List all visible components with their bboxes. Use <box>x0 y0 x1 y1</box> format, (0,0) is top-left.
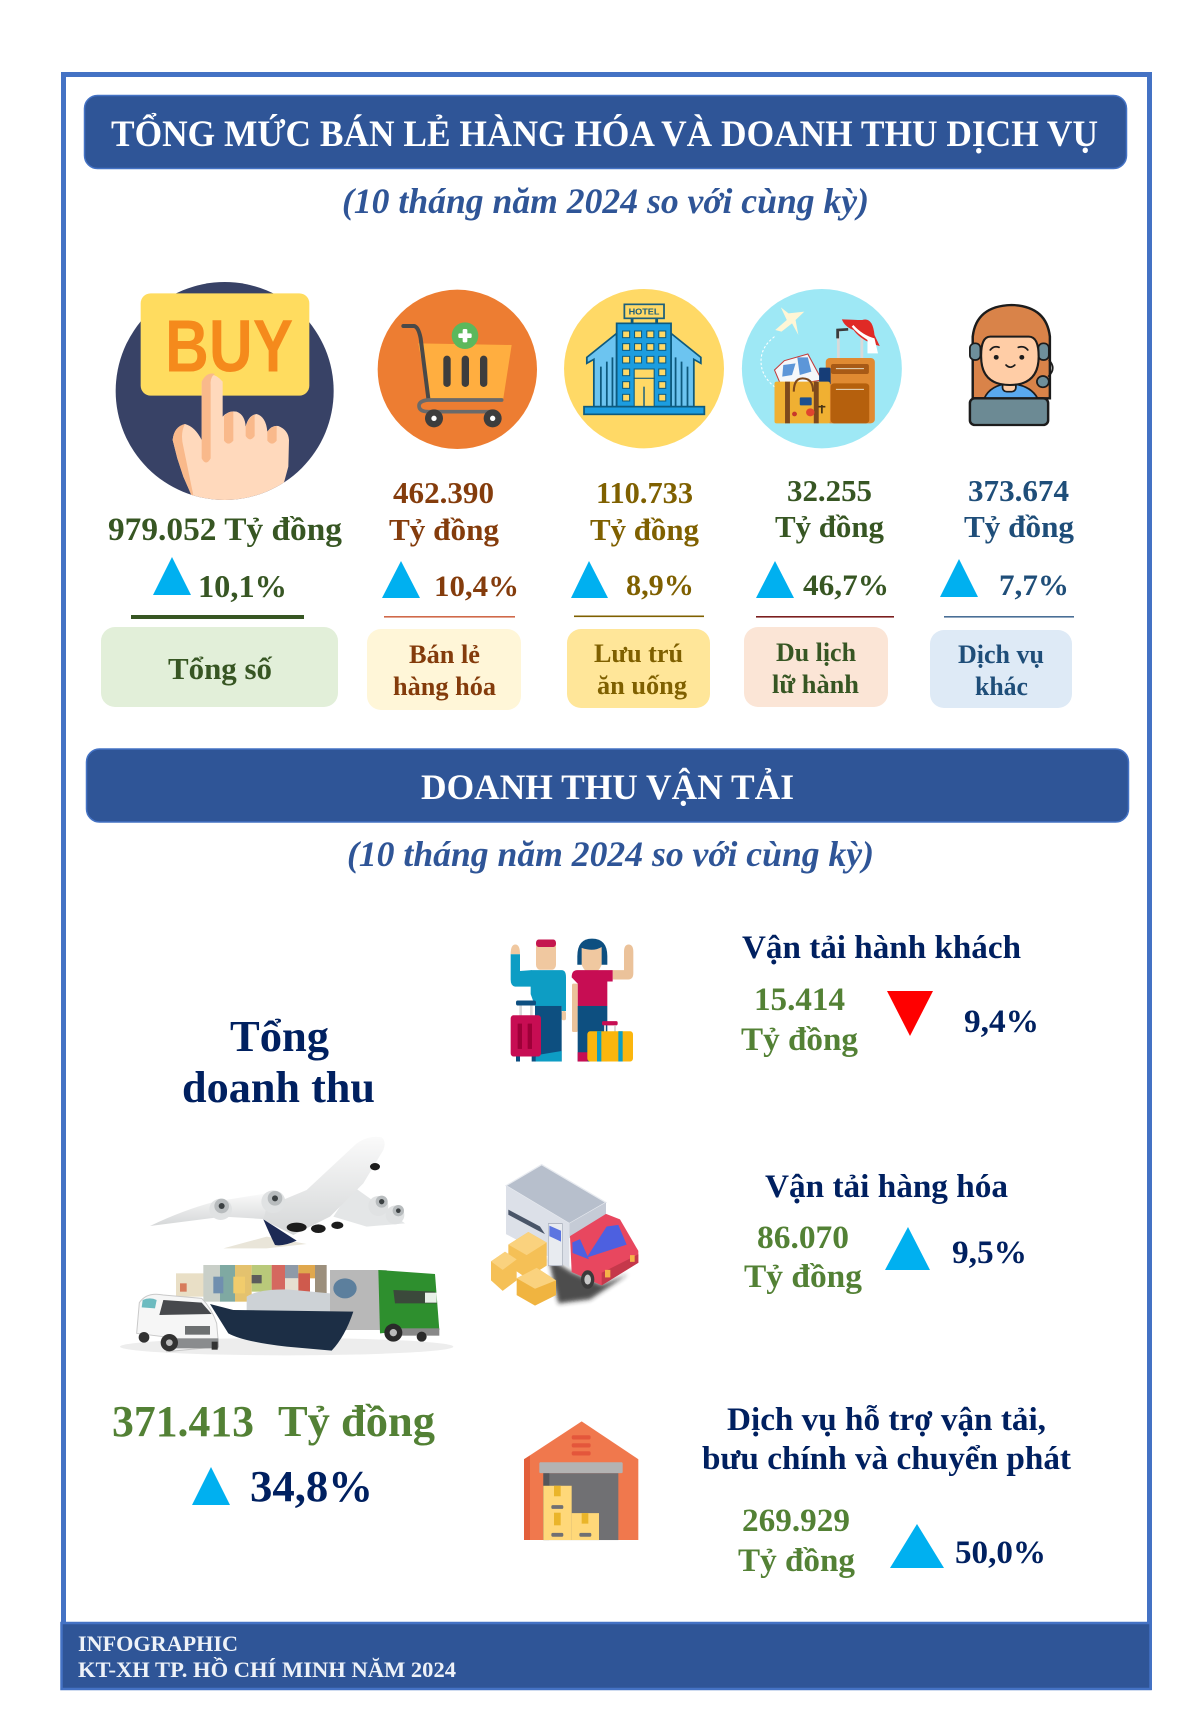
value: accommodation: Tỷ đồng <box>590 512 699 547</box>
value: retail goods: Tỷ đồng <box>389 512 499 547</box>
heading: transport <box>86 749 1128 822</box>
footer band: KT-XH TP. HỒ CHÍ MINH NĂM 2024 <box>78 1657 456 1682</box>
icon: hotel <box>564 289 724 448</box>
value: travel: Tỷ đồng <box>775 509 884 544</box>
text: logistics and postal services: bưu chính và chuyển phát <box>702 1441 1071 1477</box>
label: accommodation: Lưu trú <box>594 639 683 668</box>
panel: transport revenue <box>86 749 1128 1579</box>
subtitle: retail period: (10 tháng năm 2024 so với cùng kỳ) <box>342 181 869 221</box>
text: freight transport: Vận tải hàng hóa <box>765 1169 1008 1205</box>
footer band <box>62 1623 1150 1689</box>
icon: warehouse <box>524 1421 638 1540</box>
arrow: total transport up <box>192 1467 230 1505</box>
growth: retail: 10,4% <box>434 570 519 603</box>
heading: retail and services: TỔNG MỨC BÁN LẺ HÀNG HÓA VÀ DOANH THU DỊCH VỤ <box>111 112 1098 155</box>
arrow: accommodation up <box>571 561 608 598</box>
heading: transport: DOANH THU VẬN TẢI <box>421 767 794 807</box>
column: other services <box>930 473 1074 708</box>
arrow: other services up <box>940 559 978 597</box>
icon: buy button <box>116 282 334 503</box>
growth: total: 10,1% <box>198 568 287 604</box>
growth: other services: 7,7% <box>999 569 1069 602</box>
growth: total transport: 34,8% <box>250 1462 373 1511</box>
column: travel <box>744 473 894 707</box>
panel: retail and services revenue <box>84 96 1126 710</box>
label: retail goods: Bán lẻ <box>409 640 480 669</box>
text: passenger transport: 15.414 <box>754 982 845 1018</box>
heading: total revenue: Tổng <box>230 1012 329 1061</box>
text: freight transport <box>744 1169 1008 1295</box>
text: passenger transport <box>741 930 1021 1058</box>
label: other services: Dịch vụ <box>958 640 1044 669</box>
icon: passengers <box>511 939 633 1062</box>
text: logistics and postal services: 269.929 <box>742 1503 850 1539</box>
growth: passenger: 9,4% <box>964 1004 1039 1040</box>
icon: delivery truck <box>491 1165 638 1306</box>
text: passenger transport: Tỷ đồng <box>741 1022 859 1058</box>
heading: retail and services <box>84 96 1126 168</box>
text: logistics and postal services: Tỷ đồng <box>738 1543 856 1579</box>
arrow: retail up <box>382 561 420 598</box>
column: accommodation and food <box>567 475 710 708</box>
label: total <box>101 627 338 707</box>
column: total <box>101 512 343 707</box>
footer band: INFOGRAPHIC <box>78 1631 238 1656</box>
label: other services: khác <box>975 672 1028 701</box>
value: retail goods: 462.390 <box>393 475 494 510</box>
value: retail goods <box>389 475 499 547</box>
value: accommodation <box>590 475 699 547</box>
value: accommodation: 110.733 <box>596 475 693 510</box>
illustration: plane, ship, truck and van <box>120 1137 453 1355</box>
label: retail goods: hàng hóa <box>393 672 496 701</box>
icon: shopping cart <box>378 290 537 449</box>
label: other services <box>930 630 1072 708</box>
value: total transport revenue <box>112 1397 435 1446</box>
label: accommodation: ăn uống <box>597 671 687 700</box>
arrow: freight up <box>885 1227 930 1270</box>
value: other services <box>964 473 1074 544</box>
value: travel: 32.255 <box>787 473 872 508</box>
growth: freight: 9,5% <box>952 1235 1027 1271</box>
arrow: total up <box>153 557 191 595</box>
label: travel: lữ hành <box>772 670 860 699</box>
value: other services: Tỷ đồng <box>964 509 1074 544</box>
value: total transport revenue: Tỷ đồng <box>278 1397 435 1446</box>
value: other services: 373.674 <box>968 473 1069 508</box>
icon: call centre agent <box>970 305 1053 425</box>
label: travel <box>744 627 888 707</box>
text: logistics and postal services: Dịch vụ hỗ trợ vận tải, <box>727 1402 1046 1438</box>
arrow: passenger down <box>887 991 933 1036</box>
growth: accommodation: 8,9% <box>626 569 694 602</box>
value: travel <box>775 473 884 544</box>
heading: total revenue <box>182 1012 375 1112</box>
growth: travel: 46,7% <box>803 569 889 602</box>
label: travel: Du lịch <box>776 638 857 667</box>
text: logistics and postal services <box>702 1402 1071 1579</box>
label: accommodation <box>567 629 710 708</box>
subtitle: transport period: (10 tháng năm 2024 so với cùng kỳ) <box>347 834 874 874</box>
icon: hotel: HOTEL <box>629 307 660 317</box>
value: total transport revenue: 371.413 <box>112 1397 254 1446</box>
heading: total revenue: doanh thu <box>182 1063 375 1112</box>
icon: buy button: BUY <box>165 305 293 388</box>
value: total: 979.052 Tỷ đồng <box>108 512 343 548</box>
arrow: logistics up <box>890 1524 944 1568</box>
column: retail goods <box>367 475 521 710</box>
icon: travel luggage <box>742 289 902 448</box>
growth: logistics: 50,0% <box>955 1535 1046 1571</box>
text: freight transport: 86.070 <box>757 1220 849 1256</box>
text: freight transport: Tỷ đồng <box>744 1259 863 1295</box>
arrow: travel up <box>756 561 794 598</box>
label: total: Tổng số <box>168 651 272 686</box>
text: passenger transport: Vận tải hành khách <box>742 930 1021 966</box>
label: retail goods <box>367 629 521 710</box>
